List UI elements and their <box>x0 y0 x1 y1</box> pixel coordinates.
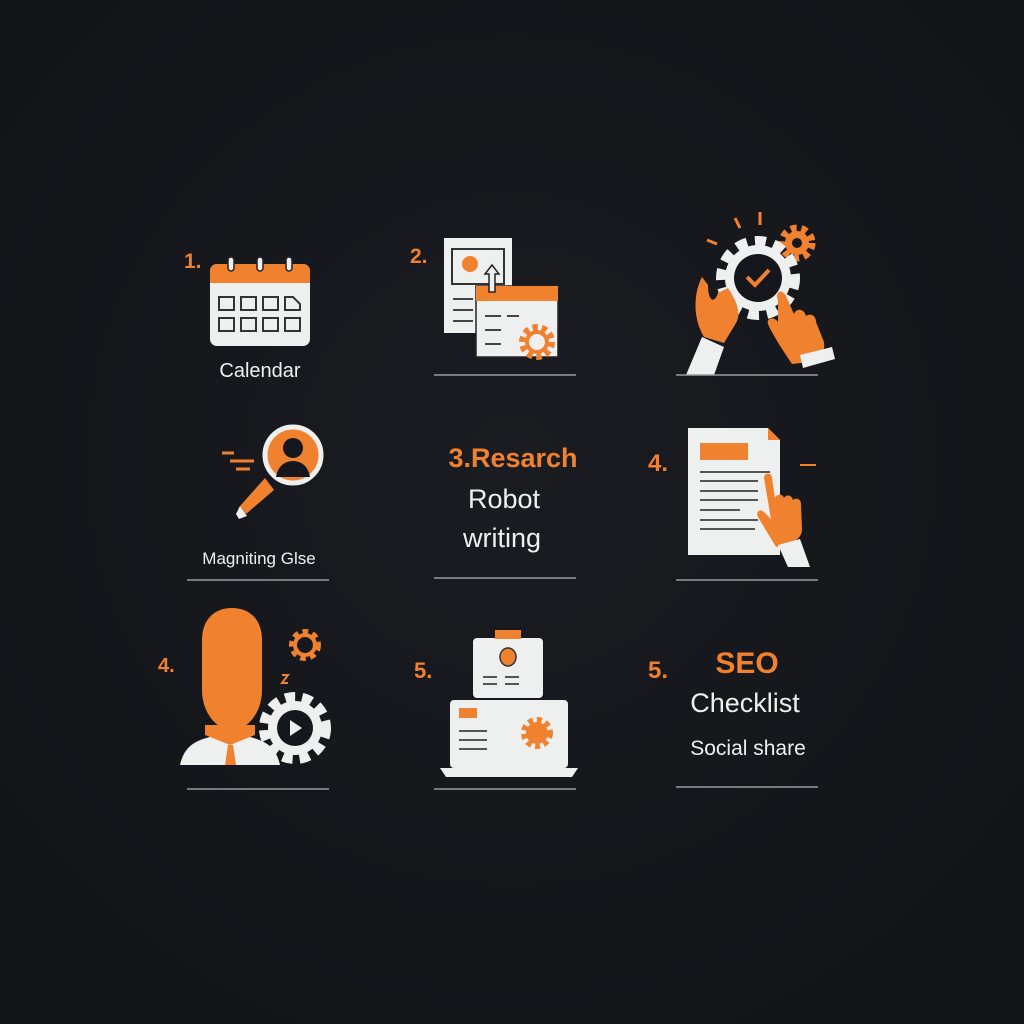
panel: documents and calendar <box>410 238 558 357</box>
panel: document with hand <box>648 428 816 567</box>
label: Magnigting Glse: Magniting Glse <box>202 549 316 568</box>
icon: document with calendar and gear <box>444 238 558 357</box>
label: Calendar: Calendar <box>219 360 301 382</box>
number 4: 4. <box>648 450 668 477</box>
text: Robot writing: Robot <box>468 484 541 514</box>
number 5: 5. <box>414 658 432 683</box>
icon: document hand <box>688 428 816 567</box>
text: Checklist: Checklist <box>690 688 800 718</box>
panel: SEO checklist <box>648 647 806 760</box>
heading: SEO: SEO <box>715 647 779 680</box>
icon: laptop and card <box>440 630 578 777</box>
text: Social share: Social share <box>690 737 806 760</box>
number 2: 2. <box>410 245 428 268</box>
panel: hands with gear <box>686 212 835 375</box>
panel: magnifying glass <box>202 427 321 568</box>
number 4: 4. <box>158 655 175 677</box>
icon: calendar <box>210 257 310 346</box>
icon: hands gear check <box>686 212 835 375</box>
number 5: 5. <box>648 657 668 684</box>
icon: person gears <box>180 608 326 765</box>
panel: research robot writing: writing <box>462 523 541 553</box>
panel: research robot writing <box>448 443 578 553</box>
heading: 3.Resarch: 3.Resarch <box>448 443 578 473</box>
panel: laptop with card <box>414 630 578 777</box>
panel: calendar <box>184 250 310 382</box>
icon: magnifier <box>222 427 321 519</box>
number 1: 1. <box>184 250 202 273</box>
panel: person with gears <box>158 608 326 765</box>
